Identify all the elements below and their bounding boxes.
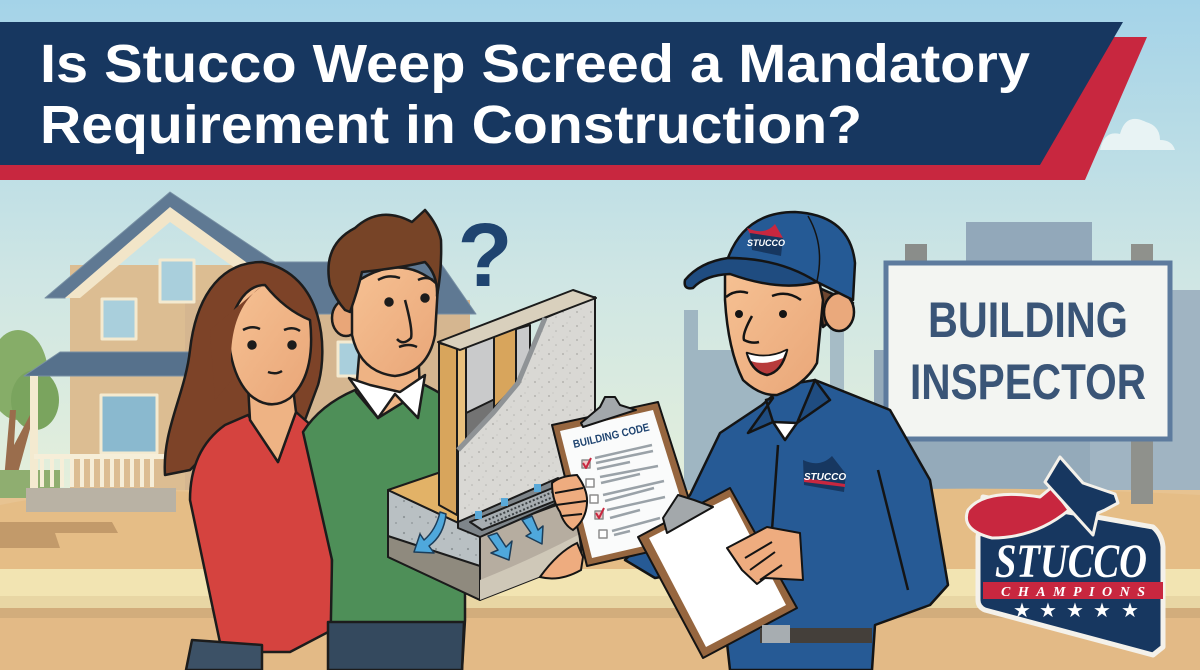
stucco champions logo: ★ (1093, 600, 1111, 622)
cap (728, 212, 855, 300)
title banner (0, 22, 1147, 180)
man (303, 210, 465, 670)
stucco panel (458, 297, 595, 522)
belt (760, 625, 872, 643)
logo swoosh (966, 487, 1069, 538)
stucco champions logo: ★ (1066, 600, 1084, 622)
sky background (0, 0, 1200, 510)
question mark: ? (458, 206, 512, 306)
building code clipboard: BUILDING CODE (572, 422, 651, 451)
floor plate (388, 473, 490, 533)
inspector (625, 212, 948, 670)
stucco champions logo: CHAMPIONS (1001, 585, 1145, 600)
ear and hair (817, 287, 853, 327)
cap logo (747, 224, 785, 256)
building inspector sign (886, 244, 1170, 504)
distant city skyline (684, 222, 1200, 510)
inspector right hand (727, 527, 803, 584)
woman (165, 262, 333, 670)
cloud (1100, 119, 1175, 150)
back panel (462, 325, 530, 480)
lumber pile (0, 522, 118, 548)
stucco champions logo (966, 457, 1163, 655)
water drainage arrows (414, 512, 543, 560)
logo trowel (1045, 457, 1118, 535)
stucco champions logo: ★ (1121, 600, 1139, 622)
house (24, 192, 476, 512)
building inspector sign: INSPECTOR (910, 354, 1146, 410)
title text (40, 34, 1030, 155)
shirt logo: STUCCO (804, 472, 846, 483)
weep screed wall cutaway (388, 290, 596, 600)
tree (0, 330, 60, 498)
stucco champions logo: ★ (1013, 600, 1031, 622)
stucco champions logo: STUCCO (995, 535, 1147, 588)
cap logo: STUCCO (747, 238, 785, 248)
collar and undershirt (773, 422, 797, 440)
building inspector sign: BUILDING (928, 292, 1128, 348)
ground (0, 489, 1200, 670)
building code clipboard (552, 397, 702, 566)
title text: Requirement in Construction? (40, 95, 862, 155)
studs (439, 343, 457, 515)
head (725, 270, 823, 395)
stucco champions logo: ★ (1039, 600, 1057, 622)
shirt logo (803, 456, 846, 492)
screed (458, 478, 575, 537)
title text: Is Stucco Weep Screed a Mandatory (40, 34, 1030, 94)
uniform shirt (625, 380, 948, 670)
concrete slab (388, 490, 480, 600)
lower hand under model (540, 543, 583, 578)
inspector left hand (552, 475, 587, 530)
blank clipboard (638, 488, 797, 658)
